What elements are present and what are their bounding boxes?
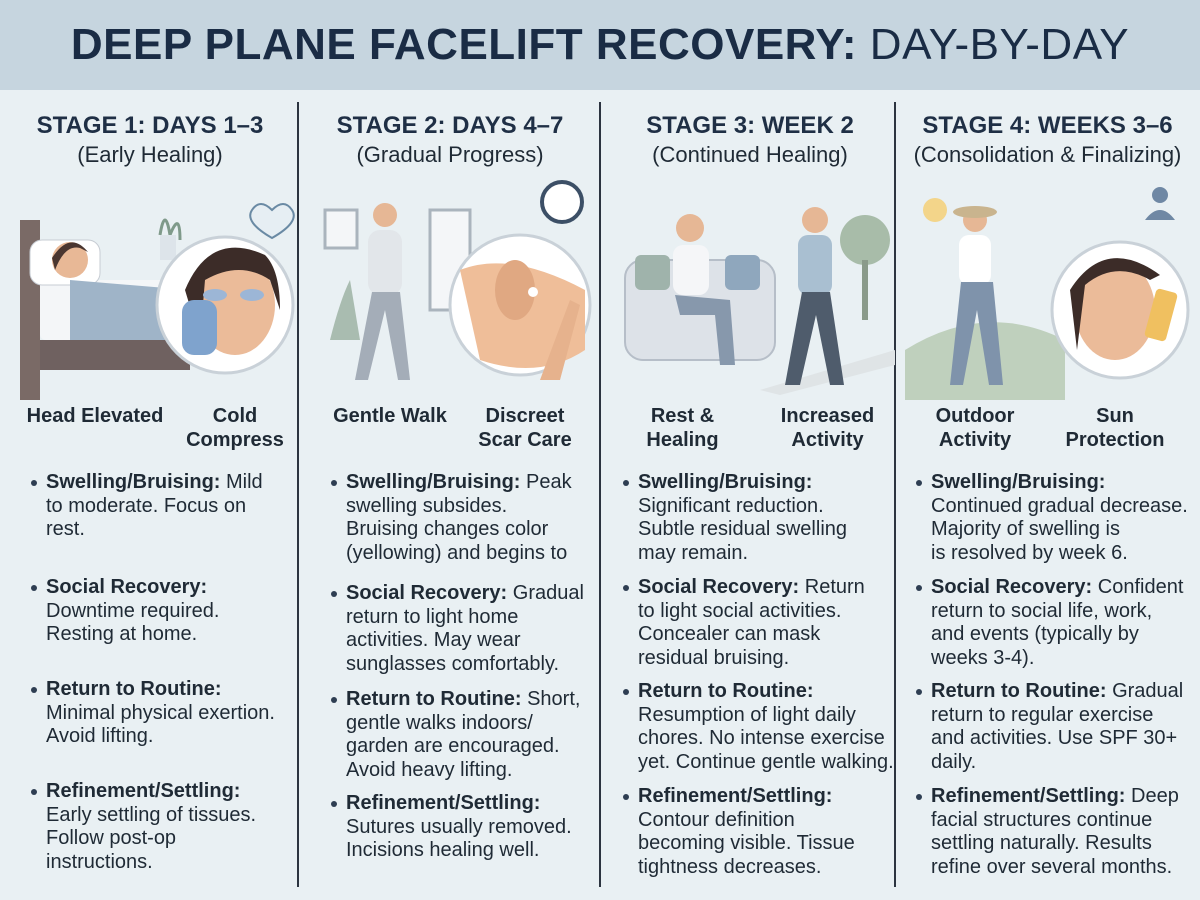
bullet: routine: Return to Routine: xyxy=(46,678,222,700)
bullet: swelling: may remain. xyxy=(638,542,748,564)
bullet: social: weeks 3-4). xyxy=(931,646,1034,668)
bullet: routine xyxy=(346,688,580,782)
bullet: routine: return to regular exercise xyxy=(931,704,1153,726)
panel: stage 2: Scar Care xyxy=(478,429,572,451)
bullet: social: Social Recovery: xyxy=(46,576,207,598)
panel: stage 3: Activity xyxy=(791,429,864,451)
bullet: routine: Return to Routine: xyxy=(638,680,814,702)
panel: stage 1: Compress xyxy=(186,429,284,451)
panel: stage 3 xyxy=(623,112,895,878)
panel: stage 2: Discreet xyxy=(486,405,564,427)
bullet: swelling: Swelling/Bruising: Mild xyxy=(46,471,263,493)
labels: Outdoor xyxy=(936,405,1014,427)
bullet: routine: Return to Routine: Short, xyxy=(346,688,580,710)
stage 1 subtitle: (Early Healing) xyxy=(77,142,223,167)
bullet: social: Downtime required. xyxy=(46,600,219,622)
bullet: refinement xyxy=(46,780,256,874)
bullet: refinement xyxy=(346,792,572,862)
illustration: bed and cold compress xyxy=(20,203,295,400)
bullet: refinement: Follow post-op xyxy=(46,827,176,849)
stage 2 heading: STAGE 2: DAYS 4–7 xyxy=(337,112,563,139)
bullet: social: Social Recovery: Gradual xyxy=(346,582,584,604)
bullet: swelling: to moderate. Focus on xyxy=(46,494,246,516)
bullet: refinement: Refinement/Settling: xyxy=(46,780,240,802)
labels xyxy=(936,405,1014,451)
labels: Activity xyxy=(939,429,1011,451)
bullet: swelling: swelling subsides. xyxy=(346,494,507,516)
bullet: social: Concealer can mask xyxy=(638,623,820,645)
panel: stage 4: Sun xyxy=(1096,405,1134,427)
stage 3 subtitle: (Continued Healing) xyxy=(652,142,848,167)
bullet: social: residual bruising. xyxy=(638,646,789,668)
bullet: social xyxy=(46,576,219,646)
bullet: routine: and activities. Use SPF 30+ xyxy=(931,727,1177,749)
bullet: swelling: Continued gradual decrease. xyxy=(931,494,1188,516)
illustration: outdoor and sun protection xyxy=(905,187,1190,400)
labels: Head Elevated xyxy=(27,405,163,427)
bullet: routine: gentle walks indoors/ xyxy=(346,712,533,734)
bullet: routine: garden are encouraged. xyxy=(346,735,560,757)
panel: stage 4: Protection xyxy=(1066,429,1164,451)
bullet: social: return to light home xyxy=(346,606,518,628)
panel: stage 3: Increased xyxy=(781,405,874,427)
illustration: walk and scar care xyxy=(324,180,592,380)
bullet: routine: Avoid heavy lifting. xyxy=(346,758,512,780)
bullet: refinement: Refinement/Settling: xyxy=(346,792,540,814)
bullet: swelling xyxy=(638,471,847,565)
bullet: refinement: facial structures continue xyxy=(931,808,1152,830)
header banner xyxy=(0,0,1200,90)
panel: stage 1 xyxy=(20,112,295,872)
panel: stage 4 xyxy=(905,112,1190,878)
bullet: swelling: Bruising changes color xyxy=(346,518,548,540)
stage 3 heading: STAGE 3: WEEK 2 xyxy=(646,112,854,139)
bullet: refinement: settling naturally. Results xyxy=(931,832,1152,854)
stage 1 heading: STAGE 1: DAYS 1–3 xyxy=(37,112,263,139)
bullet: swelling: (yellowing) and begins to xyxy=(346,542,567,564)
bullet: routine: Minimal physical exertion. xyxy=(46,702,275,724)
bullet: refinement: Refinement/Settling: xyxy=(638,785,832,807)
labels: Gentle Walk xyxy=(333,405,447,427)
bullet: swelling: is resolved by week 6. xyxy=(931,542,1128,564)
bullet: refinement: tightness decreases. xyxy=(638,856,821,878)
title: DEEP PLANE FACELIFT RECOVERY: DAY-BY-DAY xyxy=(71,20,1129,69)
panel: stage 2 xyxy=(324,112,592,861)
bullet: swelling: Subtle residual swelling xyxy=(638,518,847,540)
bullet: swelling: rest. xyxy=(46,518,85,540)
bullet: refinement: Contour definition xyxy=(638,808,795,830)
bullet: refinement xyxy=(931,785,1179,879)
bullet: social: and events (typically by xyxy=(931,623,1139,645)
bullet: refinement: instructions. xyxy=(46,850,153,872)
bullet: swelling: Swelling/Bruising: xyxy=(931,471,1105,493)
bullet: swelling: Swelling/Bruising: xyxy=(638,471,812,493)
labels xyxy=(646,405,719,451)
bullet: refinement xyxy=(638,785,855,879)
bullet: routine xyxy=(46,678,275,748)
bullet: routine xyxy=(638,680,894,774)
bullet: social: Resting at home. xyxy=(46,623,197,645)
bullet: routine: Resumption of light daily xyxy=(638,704,856,726)
bullet: routine: chores. No intense exercise xyxy=(638,727,885,749)
bullet: social xyxy=(346,582,584,676)
panel: stage 1: Cold xyxy=(213,405,257,427)
bullet: refinement: Incisions healing well. xyxy=(346,839,539,861)
bullet: social: Social Recovery: Return xyxy=(638,576,865,598)
bullet: swelling xyxy=(346,471,572,565)
bullet: refinement: Refinement/Settling: Deep xyxy=(931,785,1179,807)
bullet: routine: Return to Routine: Gradual xyxy=(931,680,1183,702)
stage 2 subtitle: (Gradual Progress) xyxy=(356,142,544,167)
bullet: social: Social Recovery: Confident xyxy=(931,576,1183,598)
labels: Rest & xyxy=(651,405,714,427)
bullet: swelling: Majority of swelling is xyxy=(931,518,1120,540)
bullet: refinement: refine over several months. xyxy=(931,856,1172,878)
bullet: swelling: Swelling/Bruising: Peak xyxy=(346,471,572,493)
stage 4 heading: STAGE 4: WEEKS 3–6 xyxy=(922,112,1173,139)
illustration: couch and walking xyxy=(624,207,895,395)
bullet: social: to light social activities. xyxy=(638,600,841,622)
bullet: social xyxy=(931,576,1183,670)
bullet: routine xyxy=(931,680,1183,774)
labels: Healing xyxy=(646,429,719,451)
bullet: routine: Avoid lifting. xyxy=(46,725,153,747)
bullet: social: return to social life, work, xyxy=(931,600,1152,622)
stage 4 subtitle: (Consolidation & Finalizing) xyxy=(914,142,1181,167)
bullet: social: sunglasses comfortably. xyxy=(346,652,559,674)
bullet: social xyxy=(638,576,865,670)
bullet: swelling: Significant reduction. xyxy=(638,494,824,516)
bullet: refinement: Sutures usually removed. xyxy=(346,816,572,838)
bullet: refinement: becoming visible. Tissue xyxy=(638,832,855,854)
bullet: swelling xyxy=(931,471,1188,565)
bullet: social: activities. May wear xyxy=(346,629,520,651)
bullet: refinement: Early settling of tissues. xyxy=(46,804,256,826)
bullet: routine: yet. Continue gentle walking. xyxy=(638,750,894,772)
bullet: routine: daily. xyxy=(931,750,976,772)
bullet: swelling xyxy=(46,471,263,542)
